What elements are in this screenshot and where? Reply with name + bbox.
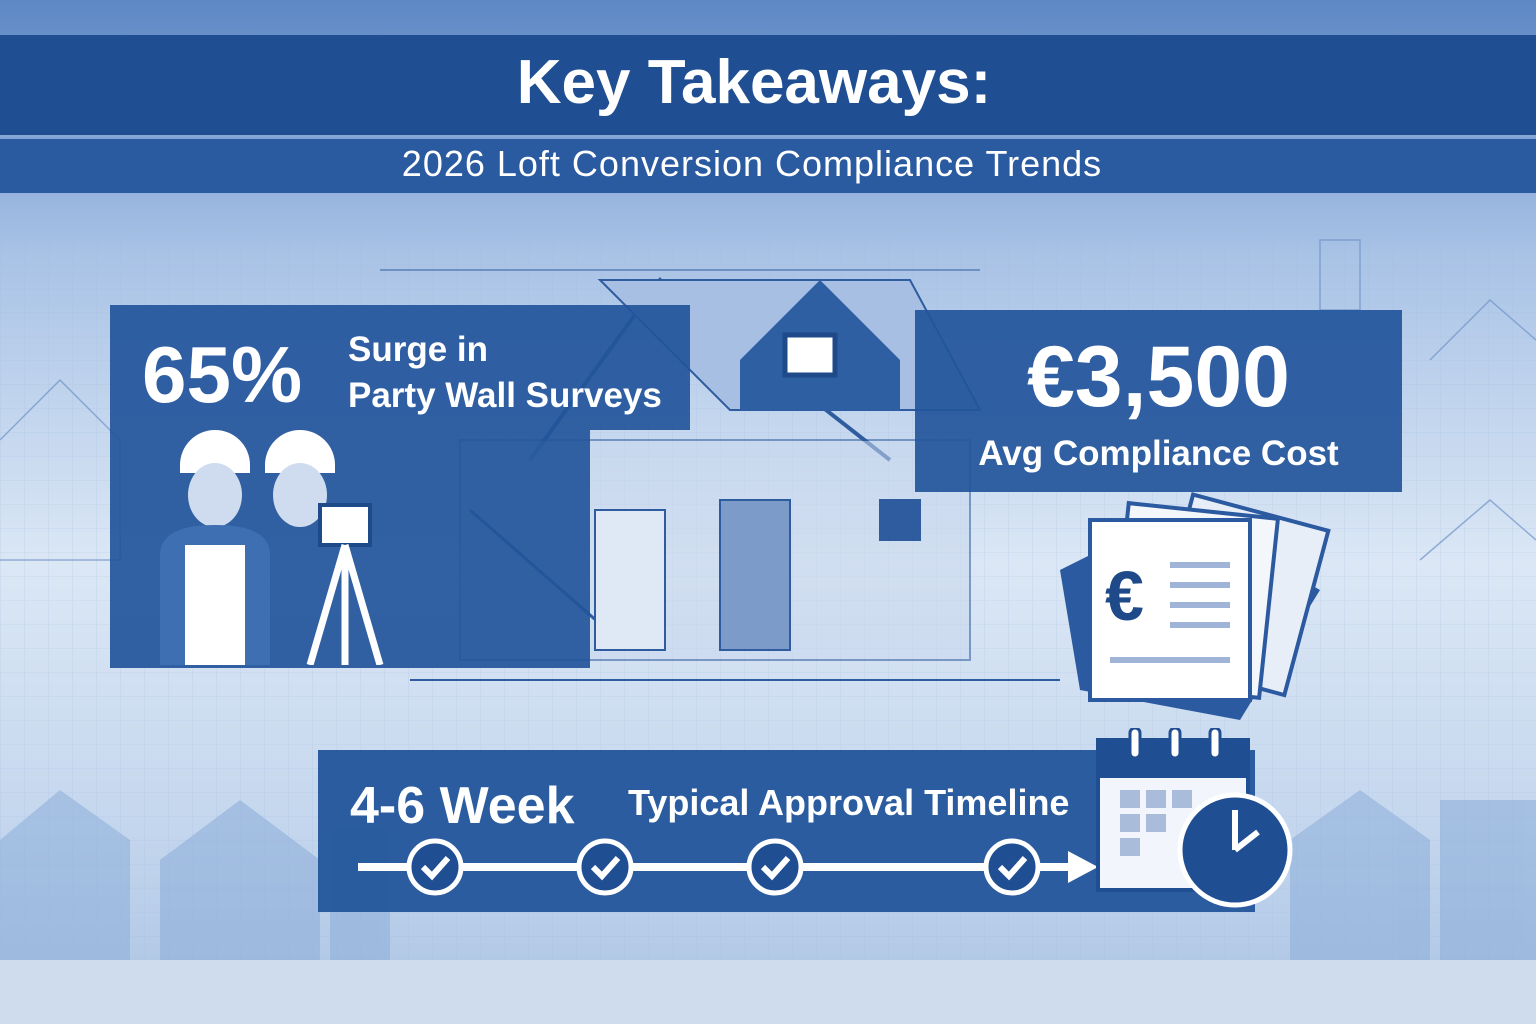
icon: invoices bbox=[1060, 492, 1331, 720]
label timeline: Typical Approval Timeline bbox=[628, 782, 1069, 823]
stat 65%: 65% bbox=[142, 330, 302, 419]
stat 4-6 week: 4-6 Week bbox=[350, 777, 575, 835]
subtitle band bbox=[0, 137, 1536, 193]
label surge: Surge in bbox=[348, 330, 488, 369]
panel: party wall surveys bbox=[110, 305, 590, 668]
text strip background bbox=[590, 305, 690, 430]
title band bbox=[0, 35, 1536, 135]
timeline with checks bbox=[358, 838, 1096, 896]
label surge: Party Wall Surveys bbox=[348, 376, 662, 415]
title: Key Takeaways: bbox=[517, 48, 991, 117]
icon: calendar and clock bbox=[1096, 728, 1292, 908]
label surge bbox=[348, 330, 662, 415]
label avg cost: Avg Compliance Cost bbox=[978, 434, 1339, 473]
icon: surveyors bbox=[160, 430, 384, 665]
stat €3,500: €3,500 bbox=[1027, 329, 1290, 425]
icon: invoices: € bbox=[1105, 557, 1144, 635]
panel: approval timeline bbox=[318, 750, 1255, 912]
panel: compliance cost bbox=[915, 310, 1402, 492]
subtitle: 2026 Loft Conversion Compliance Trends bbox=[402, 143, 1102, 184]
house illustration bbox=[380, 269, 1060, 681]
